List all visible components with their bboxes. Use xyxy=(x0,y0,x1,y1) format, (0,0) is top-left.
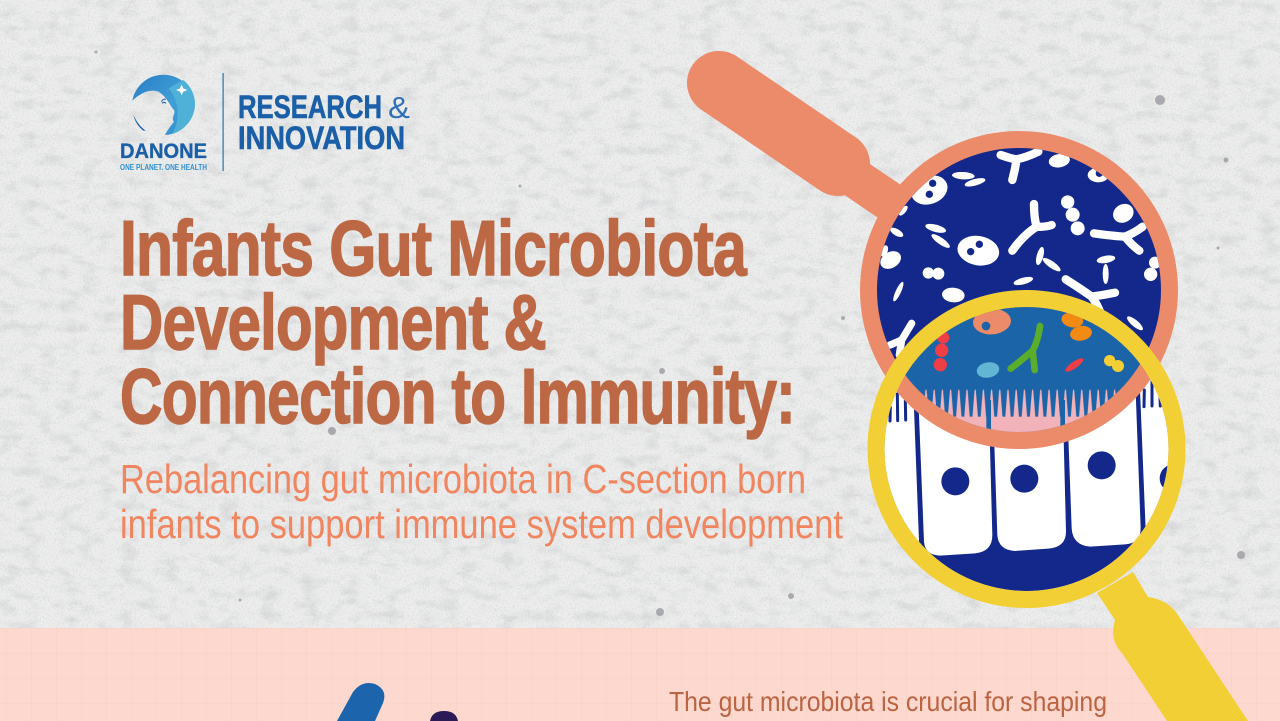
tagline: ONE PLANET. ONE HEALTH xyxy=(120,163,207,172)
lens background xyxy=(860,131,1178,449)
subtitle: Rebalancing gut microbiota in C-section born xyxy=(120,456,806,502)
logo: Danone Research and Innovation xyxy=(120,73,410,172)
lower pink band xyxy=(0,628,1280,721)
title xyxy=(120,204,795,440)
intestinal villi xyxy=(924,389,1116,432)
blue capsule bacterium xyxy=(337,683,384,721)
title: Infants Gut Microbiota xyxy=(120,204,747,292)
white microbes xyxy=(877,152,1161,355)
colourful bacteria xyxy=(934,307,1124,380)
subtitle: infants to support immune system development xyxy=(120,501,844,547)
purple capsule bacterium xyxy=(430,711,458,721)
icon: Danone globe with child profile xyxy=(132,75,195,135)
subtitle xyxy=(120,456,844,547)
title: Connection to Immunity: xyxy=(120,352,795,440)
pink ring seen through yellow lens xyxy=(896,307,1150,449)
Research and Innovation wordmark: INNOVATION xyxy=(238,120,405,156)
lens contents xyxy=(884,307,1168,591)
yellow handle xyxy=(1097,572,1248,721)
intro text: The gut microbiota is crucial for shaping xyxy=(669,686,1107,717)
DANONE wordmark: DANONE xyxy=(120,140,207,163)
pink handle xyxy=(719,83,905,212)
yellow ring xyxy=(876,298,1177,600)
epithelial cells xyxy=(880,373,1188,556)
Research and Innovation wordmark xyxy=(238,89,410,156)
icon: yellow magnifying glass showing gut lining xyxy=(860,131,1248,721)
icon: pink magnifying glass with microbes xyxy=(719,83,1178,449)
title: Development & xyxy=(120,278,546,366)
Research and Innovation wordmark: RESEARCH xyxy=(238,89,382,125)
gut lumen with bacteria xyxy=(905,307,1140,432)
Research and Innovation wordmark: & xyxy=(388,90,410,125)
